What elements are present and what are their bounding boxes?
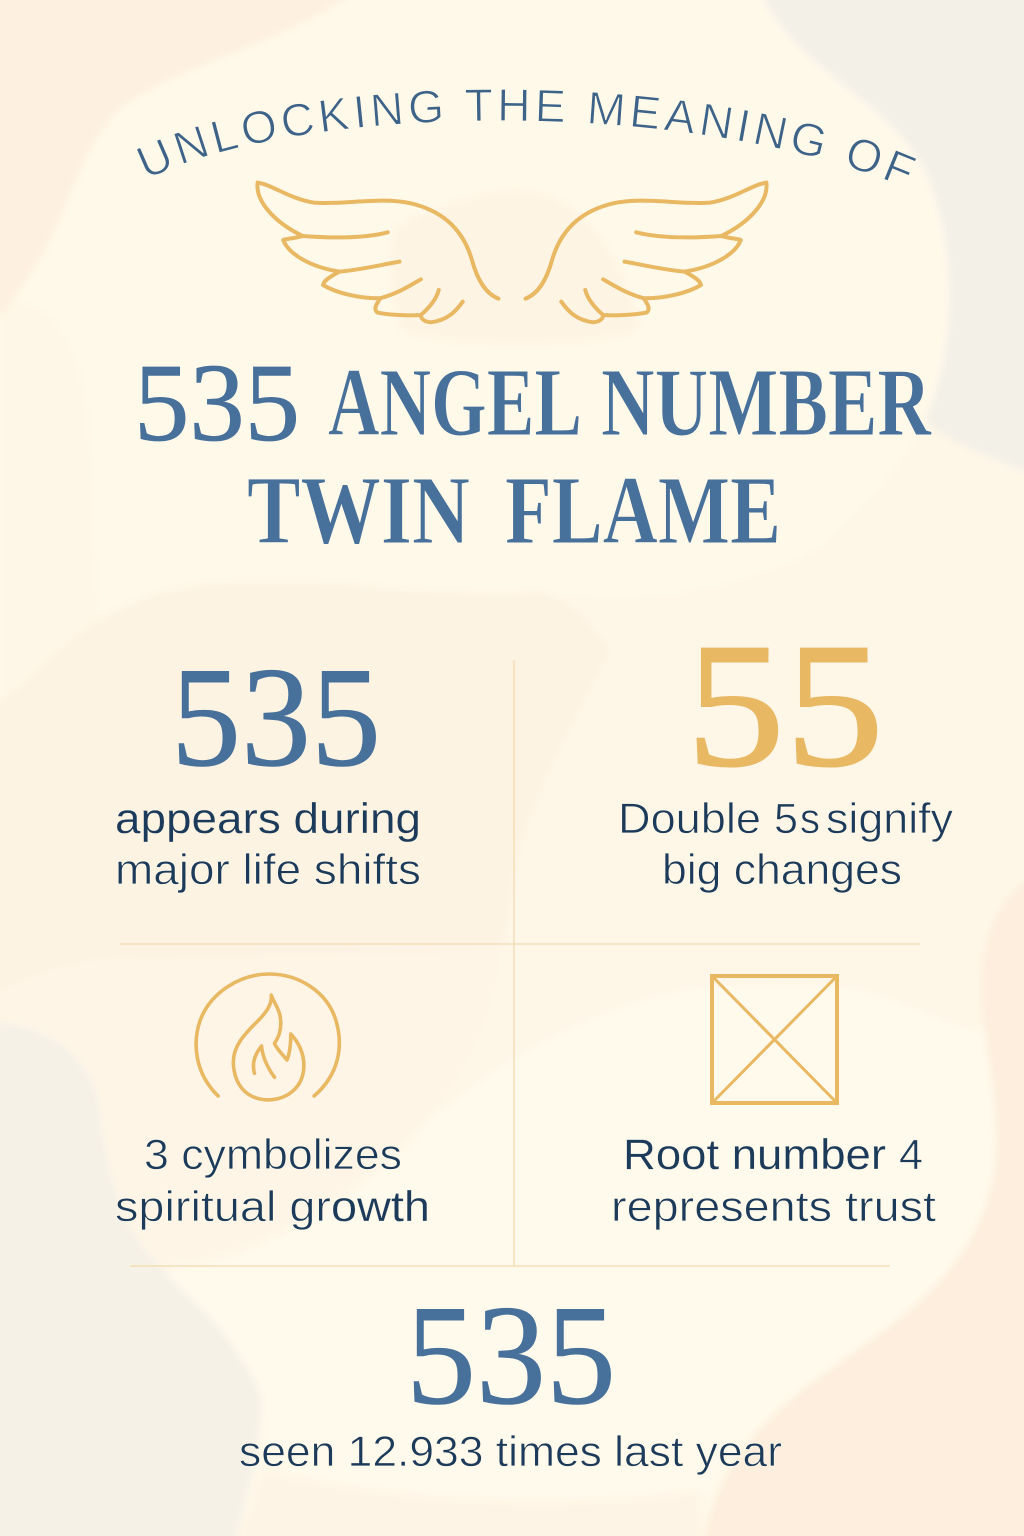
title: FLAME	[505, 457, 781, 564]
stat: 535 seen 12,933 times: 535	[406, 1276, 616, 1434]
stat: root number 4: Root number	[623, 1131, 886, 1179]
stat: 535 appears during major life shifts: appears during	[115, 795, 421, 843]
subtitle: curved heading: UNLOCKING THE MEANING OF	[137, 90, 916, 180]
title: ANGEL	[328, 349, 582, 456]
stat: flame icon and 3: spiritual gr	[115, 1183, 331, 1231]
stat: 55 double 5s: big changes	[662, 846, 902, 894]
stat: 55 double 5s: signify	[826, 795, 954, 843]
stat: 55 double 5s: s	[800, 795, 820, 843]
stat: flame icon and 3	[115, 974, 430, 1231]
right wing	[526, 183, 767, 322]
stat: flame icon and 3: owth	[331, 1183, 430, 1231]
stat: flame icon and 3: 3 cymbolizes	[144, 1131, 402, 1179]
title	[134, 342, 932, 564]
title: NUMBER	[601, 349, 932, 456]
icon: flame in circle	[196, 974, 339, 1100]
stat: 55 double 5s: 5	[774, 795, 798, 843]
icon: crossed square	[712, 976, 837, 1103]
stat: 535 appears during major life shifts	[115, 638, 421, 894]
left wing	[257, 183, 498, 322]
title: 535	[134, 342, 300, 465]
stat: root number 4: represents trust	[611, 1183, 936, 1231]
stat: 55 double 5s	[618, 606, 954, 894]
stat: 535 appears during major life shifts: major life shifts	[115, 846, 421, 894]
grid dividers	[120, 660, 920, 1266]
stat: 55 double 5s: Double	[618, 795, 761, 843]
stat: root number 4: 4	[899, 1131, 923, 1179]
stat: 535 appears during major life shifts: 535	[171, 638, 381, 796]
stat: 535 seen 12,933 times: seen 12.933 times last year	[239, 1428, 782, 1476]
icon: angel wings	[257, 183, 767, 322]
stat: 535 seen 12,933 times	[239, 1276, 782, 1476]
stat: root number 4	[611, 976, 936, 1231]
title: TWIN	[247, 457, 470, 564]
stat: 55 double 5s: 55	[686, 606, 884, 804]
